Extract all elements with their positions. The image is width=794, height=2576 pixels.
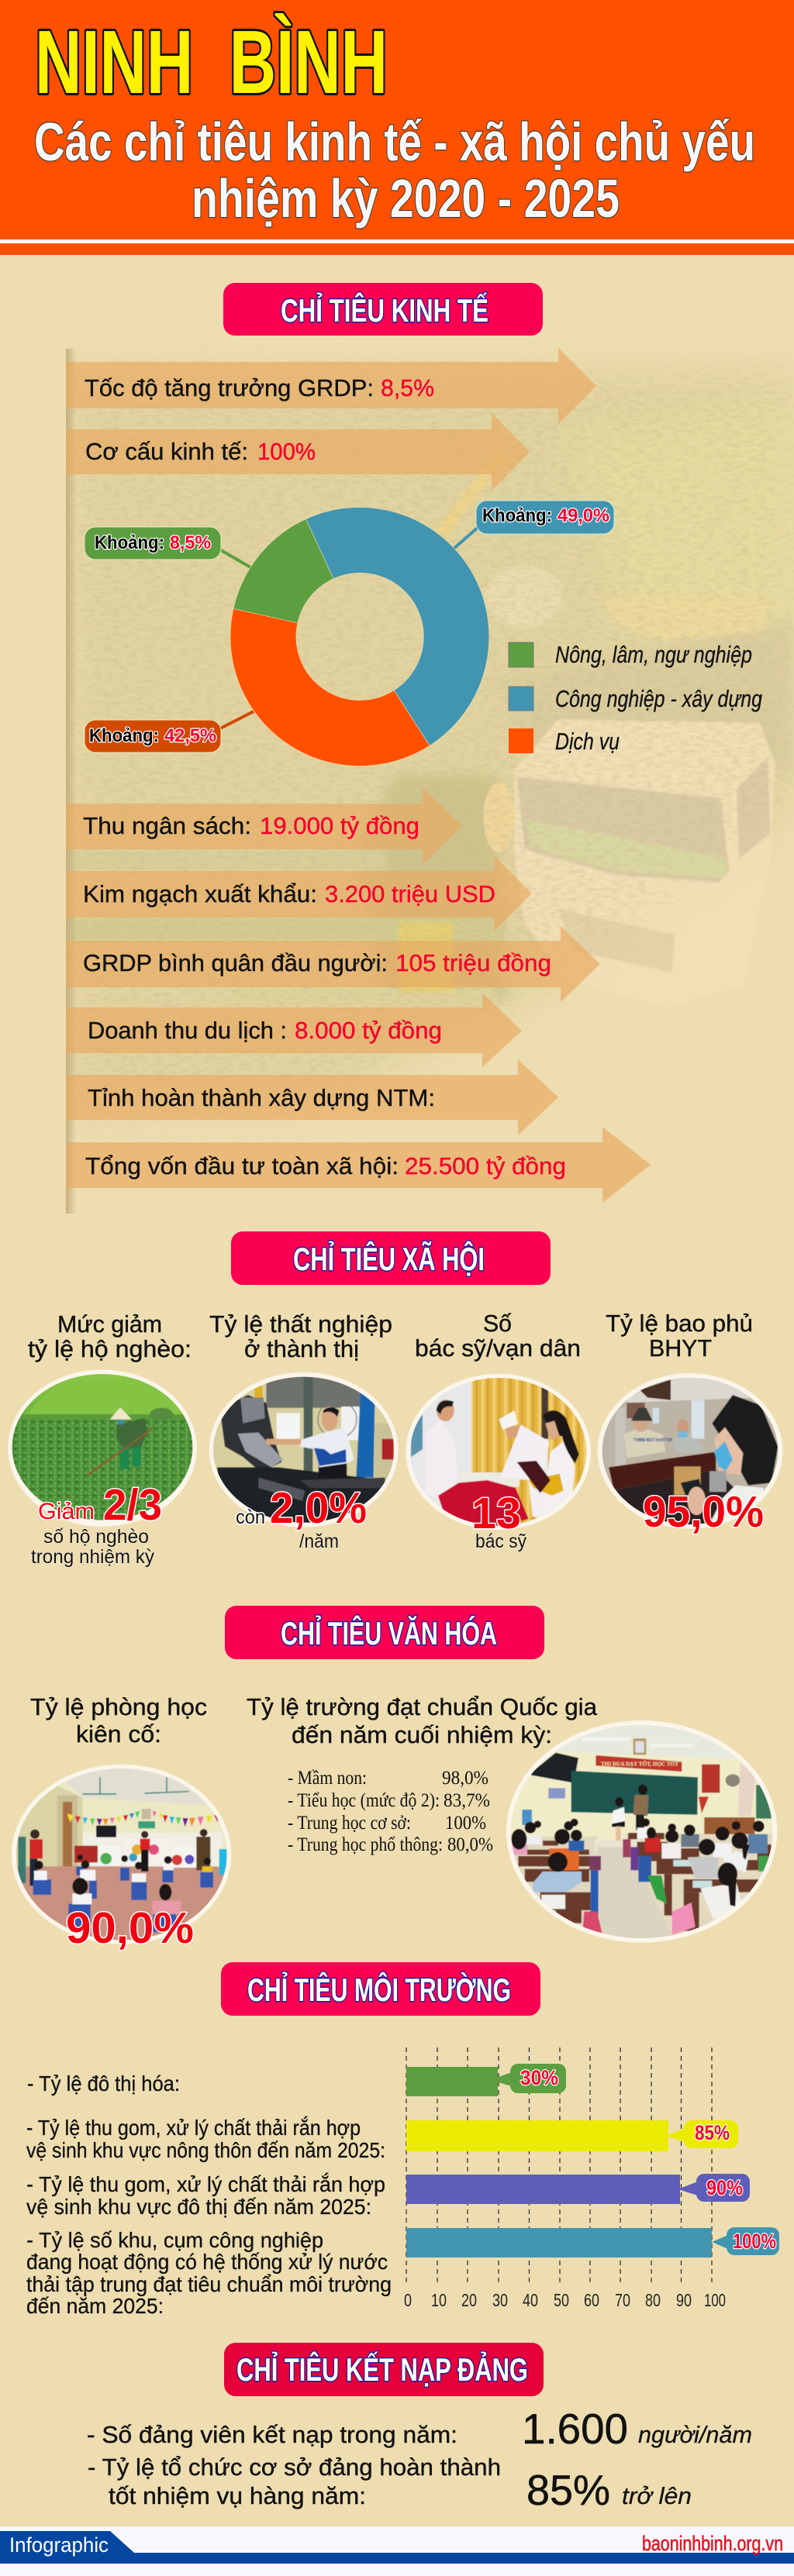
arrow: GRDP per capita (66, 926, 600, 1002)
stat: party organisations: trở lên (622, 2482, 692, 2509)
heading: cultural targets: CHỈ TIÊU VĂN HÓA (281, 1614, 497, 1651)
list: school levels (288, 1768, 493, 1855)
title: province name: NINH BÌNH (35, 12, 388, 112)
stat: doctors: bác sỹ (475, 1531, 526, 1552)
label: services: 42,5% (164, 725, 216, 746)
bar: urbanization 30%: 30% (520, 2066, 558, 2089)
stat: health insurance: 95,0% (643, 1487, 764, 1537)
axis labels: 100 (704, 2290, 726, 2310)
photo: health insurance counter (597, 1373, 783, 1529)
legend (509, 641, 762, 755)
donut segments (230, 508, 489, 766)
text: solid classrooms (30, 1693, 207, 1748)
arrow: tourism revenue: Doanh thu du lịch : (88, 1017, 287, 1044)
arrow: export turnover (66, 856, 532, 932)
stat: doctors: 13 (471, 1489, 521, 1538)
text block: environment indicators: đang hoạt động có hệ thống xử lý nước (26, 2250, 388, 2274)
axis labels (404, 2290, 726, 2310)
stat: solid classrooms: 90,0% (66, 1903, 194, 1953)
axis labels: 30 (492, 2290, 508, 2310)
column headings: social: tỷ lệ hộ nghèo: (28, 1335, 192, 1362)
list: school levels: 100% (445, 1813, 486, 1834)
column headings: social: Tỷ lệ thất nghiệp (209, 1310, 392, 1338)
stat: party organisations: - Tỷ lệ tổ chức cơ sở đảng hoàn thành (88, 2454, 501, 2481)
arrow: total social investment (66, 1127, 651, 1203)
connector lines (220, 527, 478, 728)
axis labels: 40 (523, 2290, 538, 2310)
bar: urban waste 90%: 90% (706, 2176, 743, 2199)
arrow: new rural area (66, 1059, 558, 1135)
footer (0, 2526, 794, 2576)
bar: rural waste 85% (406, 2120, 738, 2151)
axis labels: 80 (645, 2290, 661, 2310)
kids (511, 1785, 768, 1920)
photo: health insurance counter: TYHMNB WAOT HAAHT TOH (633, 1438, 672, 1443)
stat: poverty reduction (31, 1480, 162, 1568)
heading: party admission targets: CHỈ TIÊU KẾT NẠP ĐẢNG (236, 2350, 528, 2388)
label: agriculture: Khoảng: (95, 532, 164, 553)
label: services: Khoảng: (89, 725, 159, 746)
stat: party organisations (88, 2454, 692, 2514)
photo: primary school classroom: THI ĐUA DẠY TỐT, HỌC TỐT (601, 1759, 678, 1767)
heading: party admission targets (224, 2343, 544, 2396)
text block: environment indicators (26, 2071, 392, 2318)
list: school levels: 80,0% (447, 1834, 493, 1855)
text block: environment indicators: - Tỷ lệ thu gom, xử lý chất thải rắn hợp (26, 2172, 385, 2196)
text: national standard schools: đến năm cuối nhiệm kỳ: (292, 1721, 552, 1748)
heading: environment targets: CHỈ TIÊU MÔI TRƯỜNG (247, 1971, 511, 2008)
stat: urban unemployment (236, 1483, 367, 1552)
list: school levels: - Trung học cơ sở: (288, 1813, 411, 1834)
arrow: economic structure (66, 413, 530, 491)
header banner (0, 0, 794, 255)
label: industry: 49,0% (558, 505, 609, 526)
bar: industrial wastewater 100%: 100% (733, 2230, 776, 2253)
bar: industrial wastewater 100% (406, 2227, 779, 2257)
text block: environment indicators: vệ sinh khu vực đô thị đến năm 2025: (26, 2195, 371, 2219)
footer tab (0, 2531, 134, 2553)
stat: new party members: người/năm (638, 2421, 752, 2448)
text block: environment indicators: thải tập trung đạt tiêu chuẩn môi trường (26, 2272, 392, 2296)
stat: poverty reduction: Giảm (38, 1499, 95, 1524)
text block: environment indicators: - Tỷ lệ số khu, cụm công nghiệp (26, 2228, 323, 2252)
legend: Dịch vụ (555, 728, 620, 755)
label: services (85, 720, 221, 752)
column headings: social: ở thành thị (244, 1335, 359, 1362)
text: solid classrooms: Tỷ lệ phòng học (30, 1693, 207, 1720)
stat: new party members (87, 2405, 752, 2453)
arrow: tourism revenue (66, 993, 522, 1067)
backpacks (583, 1839, 768, 1935)
list: school levels: 83,7% (444, 1790, 490, 1811)
axis labels: 50 (554, 2290, 569, 2310)
arrow: total social investment: Tổng vốn đầu tư toàn xã hội: (85, 1152, 399, 1180)
stat: poverty reduction: trong nhiệm kỳ (31, 1546, 154, 1568)
list: school levels: 98,0% (442, 1768, 488, 1789)
label: agriculture (85, 527, 221, 560)
subtitle: nhiệm kỳ 2020 - 2025 (192, 168, 620, 229)
text: solid classrooms: kiên cố: (76, 1720, 161, 1748)
arrow: new rural area: Tỉnh hoàn thành xây dựng NTM: (88, 1084, 435, 1111)
photo: farmer in field (8, 1369, 197, 1527)
list: school levels: - Mầm non: (288, 1768, 367, 1789)
left desks (518, 1841, 591, 1923)
photo: factory worker (209, 1372, 399, 1527)
legend: Nông, lâm, ngư nghiệp (555, 641, 752, 668)
arrow: GRDP growth: Tốc độ tăng trưởng GRDP: (85, 374, 374, 401)
arrow: economic structure: 100% (257, 438, 316, 465)
heading: cultural targets (225, 1606, 544, 1659)
arrow: GRDP per capita: GRDP bình quân đầu người: (83, 949, 388, 976)
arrow: economic structure: Cơ cấu kinh tế: (85, 438, 248, 465)
axis labels: 10 (431, 2290, 447, 2310)
text block: environment indicators: vệ sinh khu vực nông thôn đến năm 2025: (26, 2138, 385, 2162)
arrow: total social investment: 25.500 tỷ đồng (405, 1152, 566, 1180)
heading: environment targets (221, 1962, 540, 2016)
stat: party organisations: tốt nhiệm vụ hàng năm: (109, 2482, 366, 2509)
background photo: harvester and truck (66, 341, 794, 1217)
stat: poverty reduction: 2/3 (103, 1480, 162, 1530)
stat: party organisations: 85% (526, 2466, 610, 2514)
column headings: social: BHYT (649, 1334, 712, 1362)
arrow: budget revenue: Thu ngân sách: (83, 812, 251, 839)
arrow: GRDP growth: 8,5% (381, 374, 434, 401)
axis labels: 0 (404, 2290, 412, 2310)
column headings: social: Mức giảm (57, 1310, 162, 1338)
donut chart: economic structure (85, 501, 614, 766)
column headings: social: Tỷ lệ bao phủ (606, 1310, 753, 1337)
arrow: GRDP growth (66, 348, 596, 424)
heading: economic targets (223, 283, 543, 336)
list: school levels: - Trung học phổ thông: (288, 1834, 443, 1855)
axis labels: 60 (584, 2290, 599, 2310)
arrow: budget revenue: 19.000 tỷ đồng (260, 812, 419, 839)
label: industry: Khoảng: (482, 505, 552, 526)
label: industry (476, 501, 614, 534)
text block: environment indicators: đến năm 2025: (26, 2294, 164, 2318)
arrow: GRDP per capita: 105 triệu đồng (395, 949, 551, 976)
bar: urban waste 90% (406, 2174, 750, 2204)
text: national standard schools: Tỷ lệ trường đạt chuẩn Quốc gia (247, 1693, 598, 1720)
footer label: Infographic (9, 2533, 109, 2557)
column headings: social: Số (483, 1310, 512, 1337)
column headings: social: bác sỹ/vạn dân (415, 1334, 581, 1362)
bar: urbanization 30% (406, 2064, 566, 2096)
stat: poverty reduction: số hộ nghèo (43, 1526, 149, 1548)
list: school levels: - Tiểu học (mức độ 2): (288, 1790, 440, 1811)
bar: rural waste 85%: 85% (695, 2121, 730, 2144)
axis labels: 70 (615, 2290, 630, 2310)
stat: new party members: 1.600 (522, 2405, 628, 2453)
right desks (628, 1833, 772, 1931)
column headings: social (28, 1310, 753, 1362)
text block: environment indicators: - Tỷ lệ đô thị hóa: (27, 2071, 180, 2096)
bar chart: environment indicators (404, 2047, 779, 2310)
arrow: export turnover: 3.200 triệu USD (325, 880, 495, 907)
text: national standard schools (247, 1693, 598, 1748)
heading: social targets: CHỈ TIÊU XÃ HỘI (293, 1240, 485, 1277)
heading: economic targets: CHỈ TIÊU KINH TẾ (281, 291, 488, 329)
arrow: budget revenue (66, 788, 462, 864)
subtitle (34, 112, 755, 229)
axis labels: 90 (676, 2290, 692, 2310)
photo: primary school classroom (504, 1720, 781, 1943)
axis labels: 20 (461, 2290, 477, 2310)
text block: environment indicators: - Tỷ lệ thu gom, xử lý chất thải rắn hợp (26, 2116, 361, 2140)
stat: doctors (471, 1489, 526, 1552)
label: agriculture: 8,5% (170, 532, 211, 553)
photo: kindergarten classroom (10, 1765, 233, 1947)
arrow: tourism revenue: 8.000 tỷ đồng (295, 1017, 442, 1044)
arrow: export turnover: Kim ngạch xuất khẩu: (83, 880, 317, 907)
stat: urban unemployment: còn (236, 1507, 265, 1528)
stat: new party members: - Số đảng viên kết nạp trong năm: (87, 2421, 457, 2448)
photo: doctors and patient (406, 1373, 591, 1530)
stat: urban unemployment: /năm (299, 1531, 339, 1552)
heading: social targets (231, 1231, 551, 1285)
stat: urban unemployment: 2,0% (270, 1483, 367, 1533)
